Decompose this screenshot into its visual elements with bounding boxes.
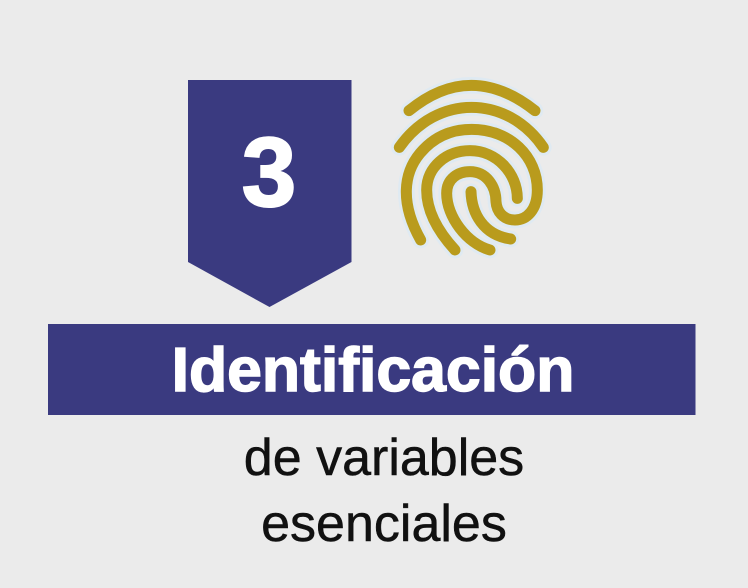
subtitle text [244,429,524,553]
icon: fingerprint [399,85,543,250]
title banner: Identificación [172,335,574,405]
subtitle text: de variables [244,429,524,487]
title banner [48,324,696,415]
subtitle text: esenciales [261,495,507,553]
badge: step number 3 [188,80,352,307]
badge: step number 3: 3 [242,117,296,227]
